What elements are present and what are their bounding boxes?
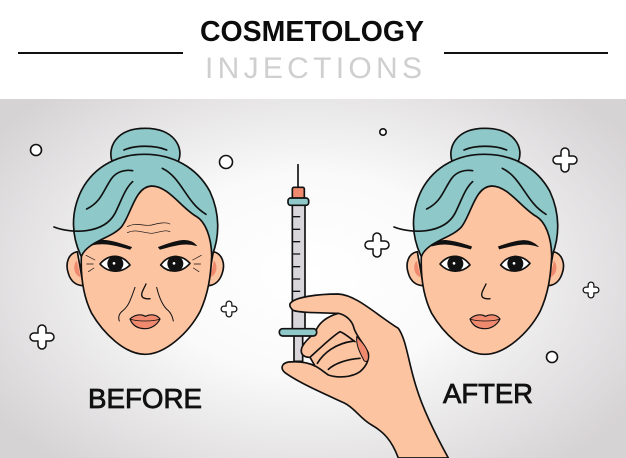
hair [73, 154, 218, 257]
forehead wrinkles [127, 223, 170, 227]
lips [470, 315, 500, 329]
syringe tip [292, 187, 304, 199]
eyebrows [92, 240, 132, 249]
hair [413, 154, 558, 257]
syringe and hand [279, 165, 448, 458]
right eye [501, 257, 530, 271]
nose [482, 284, 490, 299]
nasolabial wrinkles [119, 287, 135, 321]
left header rule [18, 52, 183, 54]
syringe plunger [294, 335, 303, 361]
nose [142, 284, 150, 299]
syringe collar [288, 198, 309, 205]
syringe barrel [292, 205, 305, 332]
hair strands [54, 182, 133, 231]
label: AFTER: AFTER [443, 378, 533, 409]
decorative sparkles outline [34, 152, 596, 345]
syringe graduation marks [293, 217, 300, 291]
face: before [54, 128, 224, 354]
title: COSMETOLOGY: COSMETOLOGY [200, 16, 424, 48]
header background [0, 0, 626, 99]
label: BEFORE: BEFORE [88, 383, 202, 414]
hand [282, 294, 448, 458]
ears [67, 252, 83, 286]
panel: gradient background [0, 99, 626, 458]
right eye [161, 257, 190, 271]
hair bun [451, 128, 520, 161]
face: after [394, 128, 564, 354]
face shape [421, 186, 552, 354]
fingers [311, 332, 355, 357]
fingernail [357, 337, 368, 362]
left eye [440, 256, 470, 271]
face shape [81, 186, 212, 354]
hair strands [394, 182, 473, 231]
decorative sparkles fill [34, 152, 596, 345]
needle [295, 165, 300, 187]
left eye [100, 256, 130, 271]
crow's feet [86, 255, 201, 272]
hair bun [111, 128, 180, 161]
syringe flange [279, 329, 317, 336]
subtitle: INJECTIONS: INJECTIONS [205, 52, 422, 85]
ears [407, 252, 423, 286]
right header rule [444, 52, 608, 54]
eyebrows [432, 240, 472, 249]
decorative circles [30, 129, 558, 362]
lips [130, 315, 160, 329]
